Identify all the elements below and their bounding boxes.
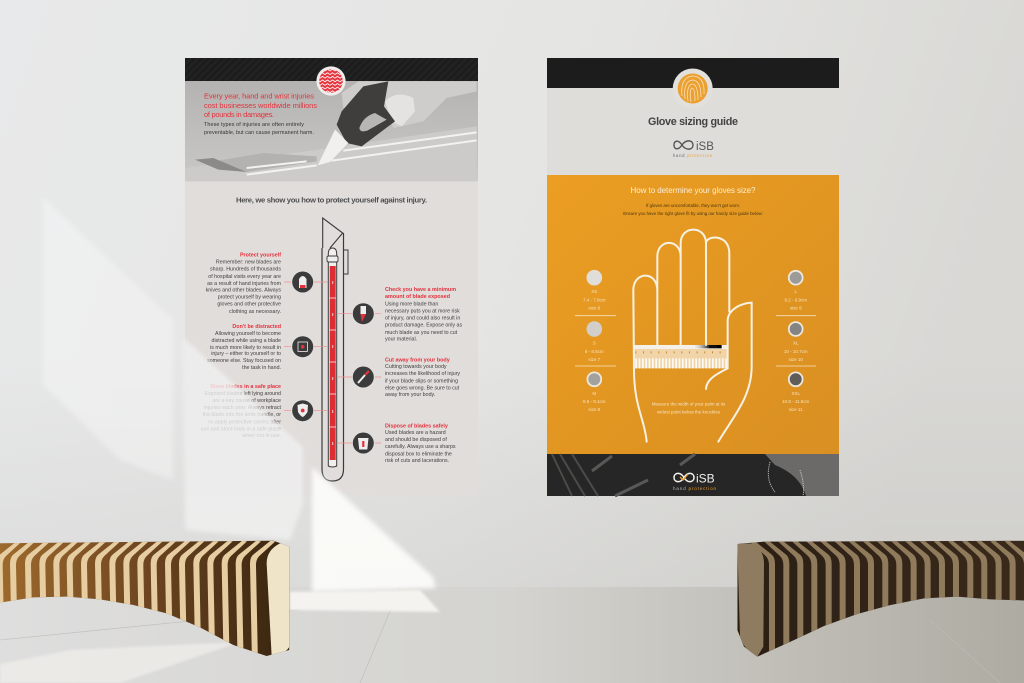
floor: [0, 587, 1024, 683]
text: dispose safely: [385, 423, 456, 464]
text: protect yourself: of hospital visits every year are: [208, 274, 281, 280]
sunlight on floor: [0, 590, 440, 683]
icon: disposal bin: [353, 432, 374, 454]
poster photo: cutter on cardboard: [185, 81, 478, 181]
text: don't be distracted: the task in hand.: [242, 365, 281, 371]
text: cut away: else goes wrong. Be sure to cut: [385, 386, 460, 392]
text: don't be distracted: injury – either to yourself or to: [211, 351, 281, 357]
size XS: 7.4 - 7.9cm: [583, 298, 606, 302]
measuring instruction: Measure the width of your palm at its: [652, 401, 726, 406]
icon: target focus: [292, 336, 313, 357]
size XL: 10 - 10.7cm: [784, 349, 808, 354]
bottom photo band: [547, 454, 839, 496]
size L: 9.2 - 9.9cm: [784, 298, 807, 302]
bench right: [737, 540, 1024, 663]
text: blade exposure: Check you have a minimum: [385, 287, 456, 293]
text: blade exposure: product damage. Expose only as: [385, 323, 462, 329]
size S: S: [593, 340, 596, 346]
intro statement: These types of injuries are often entirely: [204, 122, 304, 128]
size XS: size 6: [588, 306, 601, 311]
orange subheading: Ensure you have the right glove fit by using our handy size guide below:: [623, 211, 763, 216]
connectors from icons to knife: [284, 282, 381, 443]
ruler: [633, 345, 728, 368]
hand outline: [633, 230, 752, 442]
text: don't be distracted: [207, 324, 281, 371]
text: don't be distracted: distracted while using a blade: [212, 338, 281, 344]
orange subheading: If gloves are uncomfortable, they won't get worn.: [646, 203, 740, 208]
text: blade exposure: Using more blade than: [385, 302, 438, 308]
text: store blades safely: re-apply protective covers after: [208, 420, 281, 426]
orange subheading: [623, 203, 763, 216]
text: dispose safely: disposal box to eliminate the: [385, 452, 452, 458]
text: protect yourself: knives and other blades. Always: [206, 288, 281, 294]
text: dispose safely: Used blades are a hazard: [385, 430, 446, 436]
size M: size 8: [588, 407, 601, 412]
size XS: [583, 270, 606, 311]
text: don't be distracted: Allowing yourself to become: [215, 331, 281, 337]
measuring instruction: [652, 401, 726, 414]
icon: gloved hand: [292, 272, 313, 292]
hand and ruler diagram: [633, 230, 752, 442]
text: store blades safely: Store blades in a safe place: [210, 384, 281, 390]
text: store blades safely: [201, 384, 282, 439]
size S: [585, 321, 604, 362]
size M: 8.6 - 9.1cm: [583, 399, 606, 404]
poster background: [185, 58, 478, 495]
text: protect yourself: sharp. Hundreds of thousands: [210, 267, 281, 273]
size XS: XS: [591, 289, 597, 294]
size XL: [784, 321, 808, 362]
text: blade exposure: necessary puts you at more risk: [385, 308, 460, 314]
size XXL: 10.8 - 11.5cm: [782, 399, 810, 404]
text: protect yourself: Protect yourself: [240, 252, 281, 258]
measuring instruction: widest point below the knuckles: [657, 409, 721, 414]
text: store blades safely: the blade into the knife handle, or: [203, 412, 281, 418]
size XL: XL: [793, 340, 799, 346]
badge: fingerprint: [673, 68, 713, 108]
title: Glove sizing guide: [648, 116, 738, 128]
text: don't be distracted: someone else. Stay focused on: [207, 358, 281, 364]
intro statement: of pounds in damages.: [204, 110, 274, 119]
text: dispose safely: Dispose of blades safely: [385, 423, 448, 429]
text: cut away: [385, 358, 460, 398]
text: store blades safely: when not in use.: [242, 433, 281, 439]
icon: exposed blade: [353, 303, 374, 324]
text: blade exposure: your material.: [385, 337, 417, 343]
logo: footer iSB: [673, 472, 716, 491]
intro statement: cost businesses worldwide millions: [204, 101, 317, 110]
size M: [583, 372, 606, 412]
sunlight falling across wall and poster: [43, 197, 436, 592]
size S: size 7: [588, 357, 601, 362]
orange heading: How to determine your gloves size?: [630, 186, 756, 195]
logo: iSB hand protection: iSB: [696, 141, 714, 153]
text: protect yourself: as a result of hand injuries from: [207, 281, 282, 287]
text: blade exposure: amount of blade exposed: [385, 294, 450, 300]
intro statement: Every year, hand and wrist injuries: [204, 91, 314, 100]
text: blade exposure: [385, 287, 462, 343]
text: cut away: away from your body.: [385, 392, 435, 398]
intro statement: preventable, but can cause permanent harm.: [204, 130, 314, 136]
size L: [784, 270, 807, 311]
size L: L: [794, 289, 797, 294]
text: don't be distracted: is much more likely to result in: [210, 345, 281, 351]
icon: cutting away: [353, 366, 374, 388]
logo: footer iSB: hand protection: [673, 486, 716, 491]
text: cut away: Cut away from your body: [385, 358, 450, 364]
size XXL: size 11: [789, 407, 803, 412]
intro statement: [204, 91, 317, 136]
text: protect yourself: gloves and other protective: [217, 302, 281, 308]
text: protect yourself: Remember: new blades are: [216, 260, 281, 266]
size S: 8 - 8.5cm: [585, 349, 604, 354]
poster: glove sizing guide: [547, 58, 839, 496]
text: cut away: increases the likelihood of injury: [385, 371, 460, 377]
text: protect yourself: clothing as necessary.: [229, 309, 281, 315]
logo: iSB hand protection: [673, 141, 714, 158]
text: dispose safely: carefully. Always use a sharps: [385, 444, 456, 450]
logo: footer iSB: iSB: [696, 472, 715, 486]
text: protect yourself: protect yourself by wearing: [218, 295, 281, 301]
size XXL: XXL: [791, 391, 800, 396]
poster: hand injury protection: [185, 58, 478, 495]
text: store blades safely: Exposed blades left lying around: [204, 391, 281, 397]
knife diagram: [322, 218, 348, 481]
size XXL: [782, 372, 810, 412]
text: blade exposure: of injury, and could also result in: [385, 316, 460, 322]
size L: size 9: [790, 306, 802, 311]
orange panel: [547, 175, 839, 454]
top band: [547, 58, 839, 88]
logo: iSB hand protection: hand protection: [673, 153, 713, 158]
upper panel: [547, 88, 839, 176]
text: store blades safely: injuries each year. Always retract: [204, 405, 282, 411]
text: blade exposure: much blade as you need to cut: [385, 330, 458, 336]
text: cut away: Cutting towards your body: [385, 364, 447, 370]
size XL: size 10: [789, 357, 803, 362]
text: dispose safely: and should be disposed of: [385, 437, 447, 443]
badge: red glove pattern: [316, 66, 346, 96]
heading: protect against injury: Here, we show you how to protect yourself against injury.: [236, 196, 427, 205]
text: store blades safely: are a key cause of workplace: [212, 398, 281, 404]
text: don't be distracted: Don't be distracted: [232, 324, 281, 330]
bench left: [0, 540, 293, 663]
poster top band: [185, 58, 478, 81]
text: cut away: if your blade slips or something: [385, 379, 458, 385]
icon: safety shield: [292, 400, 313, 421]
size M: M: [592, 391, 596, 396]
text: protect yourself: [206, 252, 282, 315]
knife red scale: [330, 266, 336, 460]
text: dispose safely: risk of cuts and lacerations.: [385, 458, 449, 464]
text: store blades safely: use and store tools in a safe place: [201, 427, 281, 433]
